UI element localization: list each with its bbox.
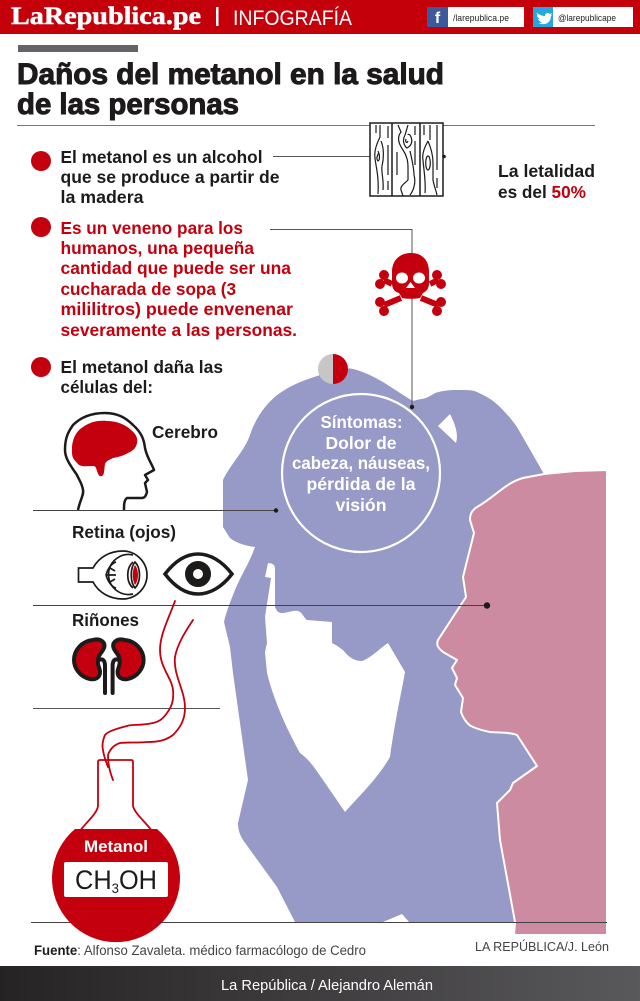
symptoms circle: pérdida de la xyxy=(306,474,416,494)
title: de las personas xyxy=(17,88,239,121)
chemical formula: OH xyxy=(119,865,157,895)
icon: eye xyxy=(165,554,232,594)
lethality callout: es del 50% xyxy=(498,182,586,202)
silhouette: small gap by the hair xyxy=(438,414,457,443)
twitter badge xyxy=(533,7,633,27)
symptoms circle xyxy=(282,394,440,552)
divider: kidneys xyxy=(33,708,220,710)
icon: kidneys xyxy=(74,639,144,693)
bullet 2 xyxy=(31,217,297,340)
twitter badge: @larepublicape xyxy=(558,13,616,23)
facebook badge: f xyxy=(435,10,441,27)
lethality callout xyxy=(498,161,595,202)
symptoms circle: visión xyxy=(336,495,386,515)
chemical formula: CH xyxy=(75,865,114,895)
bullet 2: humanos, una pequeña xyxy=(60,238,254,258)
bullet 3: células del: xyxy=(60,377,153,397)
right edge mask for pink face xyxy=(608,460,640,940)
lethality callout: La letalidad xyxy=(498,161,595,181)
header bar xyxy=(0,0,640,34)
silhouette: purple person xyxy=(223,368,560,922)
bullet 3: El metanol daña las xyxy=(60,357,223,377)
bullet 2: Es un veneno para los xyxy=(60,218,243,238)
bullet 1: El metanol es un alcohol xyxy=(60,147,262,167)
bullet 1 xyxy=(31,147,280,207)
bottom rule xyxy=(31,922,607,924)
half-filled lethality dot xyxy=(318,354,348,384)
bullet 1: que se produce a partir de xyxy=(60,167,280,187)
icon: head with brain xyxy=(65,413,154,510)
divider with dot: brain xyxy=(33,508,278,513)
vapour lines xyxy=(102,601,193,780)
title rule xyxy=(17,124,595,126)
silhouette: pink face xyxy=(437,470,607,935)
flask label: Metanol xyxy=(84,838,148,856)
leader to wood xyxy=(273,156,370,158)
facebook badge: /larepublica.pe xyxy=(453,13,509,23)
bullet 2: cantidad que puede ser una xyxy=(60,258,291,278)
bullet 1: la madera xyxy=(60,187,144,207)
source: Fuente: Alfonso Zavaleta. médico farmacólogo de Cedro xyxy=(34,943,366,958)
bullet 2: cucharada de sopa (3 xyxy=(60,279,236,299)
footer bar: La República / Alejandro Alemán xyxy=(221,978,433,994)
facebook badge xyxy=(427,7,524,27)
bullet 2: severamente a las personas. xyxy=(60,320,297,340)
divider with dot: eye to face xyxy=(33,602,490,609)
symptoms circle: Síntomas: xyxy=(320,412,402,432)
leader to symptoms xyxy=(270,230,414,409)
label: cerebro: Cerebro xyxy=(152,422,218,442)
icon: skull and crossbones xyxy=(375,253,446,316)
symptoms circle: cabeza, náuseas, xyxy=(292,453,430,473)
title xyxy=(17,58,444,121)
bullet 2: mililitros) puede envenenar xyxy=(60,299,293,319)
symptoms circle: Dolor de xyxy=(326,433,397,453)
credit: LA REPÚBLICA/J. León xyxy=(475,939,609,954)
wood leader dot xyxy=(442,155,446,158)
chemical formula: 3 xyxy=(112,880,119,896)
footer bar xyxy=(0,966,640,1001)
title: Daños del metanol en la salud xyxy=(17,58,444,91)
section label: INFOGRAFÍA xyxy=(233,7,352,30)
bullet 3 xyxy=(31,357,223,397)
silhouette: neck and chest gap xyxy=(265,563,405,812)
label: retina: Retina (ojos) xyxy=(72,522,176,542)
icon: eye anatomy xyxy=(78,551,147,599)
flask xyxy=(52,760,180,942)
title accent bar xyxy=(18,45,138,52)
label: riñones: Riñones xyxy=(72,610,139,630)
logo: LaRepublica.pe xyxy=(11,3,201,30)
icon: wood xyxy=(370,123,443,196)
